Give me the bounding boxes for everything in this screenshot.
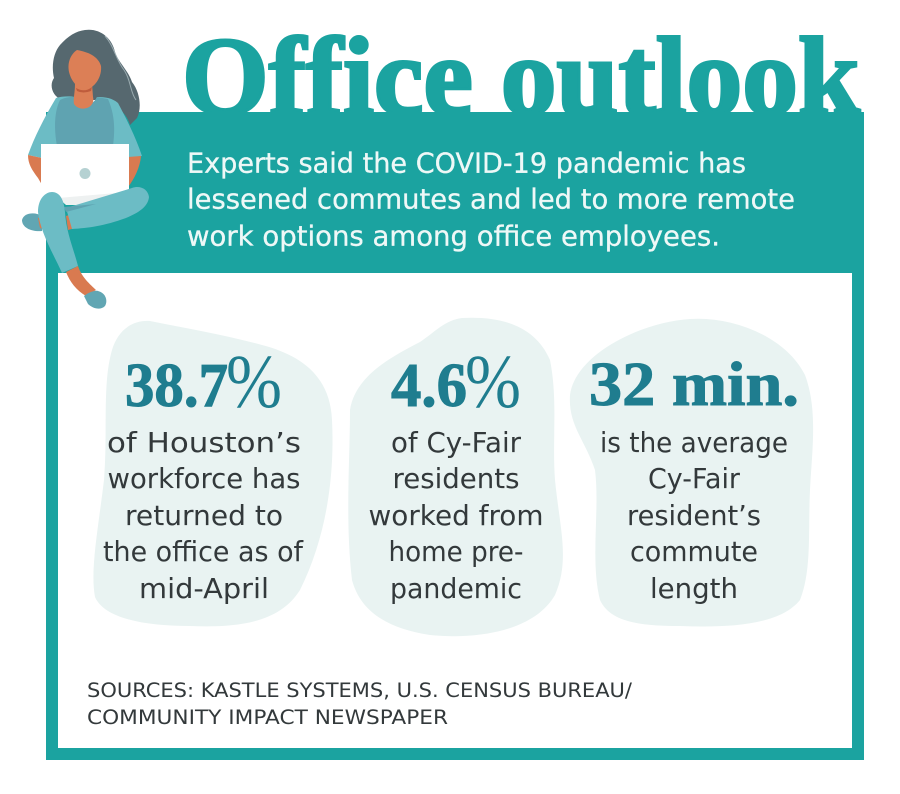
crossed leg [66,187,149,229]
face [68,50,101,89]
sources: SOURCES: KASTLE SYSTEMS, U.S. CENSUS BUREAU/ [87,679,632,702]
stat 2: home pre- [388,535,524,568]
stat 1: % [226,340,282,424]
stat 3: Cy-Fair [648,462,740,495]
stat 3 [589,351,799,605]
stat 3: is the average [600,426,788,459]
sources: COMMUNITY IMPACT NEWSPAPER [87,706,448,729]
title: Office outlook [182,16,860,139]
stat 1: the office as of [103,535,304,568]
blob: stat 3 [570,319,813,627]
laptop [41,144,129,202]
stat 1: workforce has [108,462,300,495]
blob: stat 2 [348,318,563,636]
stat 1: mid-April [139,572,269,605]
stat 2 [368,340,544,605]
shin and front foot [66,266,96,296]
stat 2: of Cy-Fair [391,426,521,459]
far foot [22,213,42,231]
intro text: lessened commutes and led to more remote [187,184,795,216]
stat 1: of Houston’s [107,426,301,459]
neck [74,84,93,109]
hair [52,30,140,125]
stat 2: residents [392,462,520,495]
intro text [187,148,795,252]
stat 3: commute [630,535,758,568]
stat 3: length [650,572,738,605]
sources [87,679,632,729]
stat 2: 4.6 [391,352,467,420]
blob: stat 1 [93,321,333,626]
panel: teal frame [46,112,864,760]
intro text: work options among office employees. [187,220,720,252]
sweater [28,96,142,158]
forearms [28,155,45,190]
stat 2: worked from [368,499,544,532]
front leg [38,192,78,273]
stat 2: pandemic [390,572,522,605]
stat 1 [103,340,304,605]
stat 1: returned to [125,499,283,532]
stat 2: % [465,340,521,424]
illustration: woman with laptop [22,30,149,309]
stat 3: resident’s [627,499,761,532]
stat 1: 38.7 [125,352,228,420]
intro text: Experts said the COVID-19 pandemic has [187,148,746,180]
stat 3: 32 min. [589,351,799,419]
